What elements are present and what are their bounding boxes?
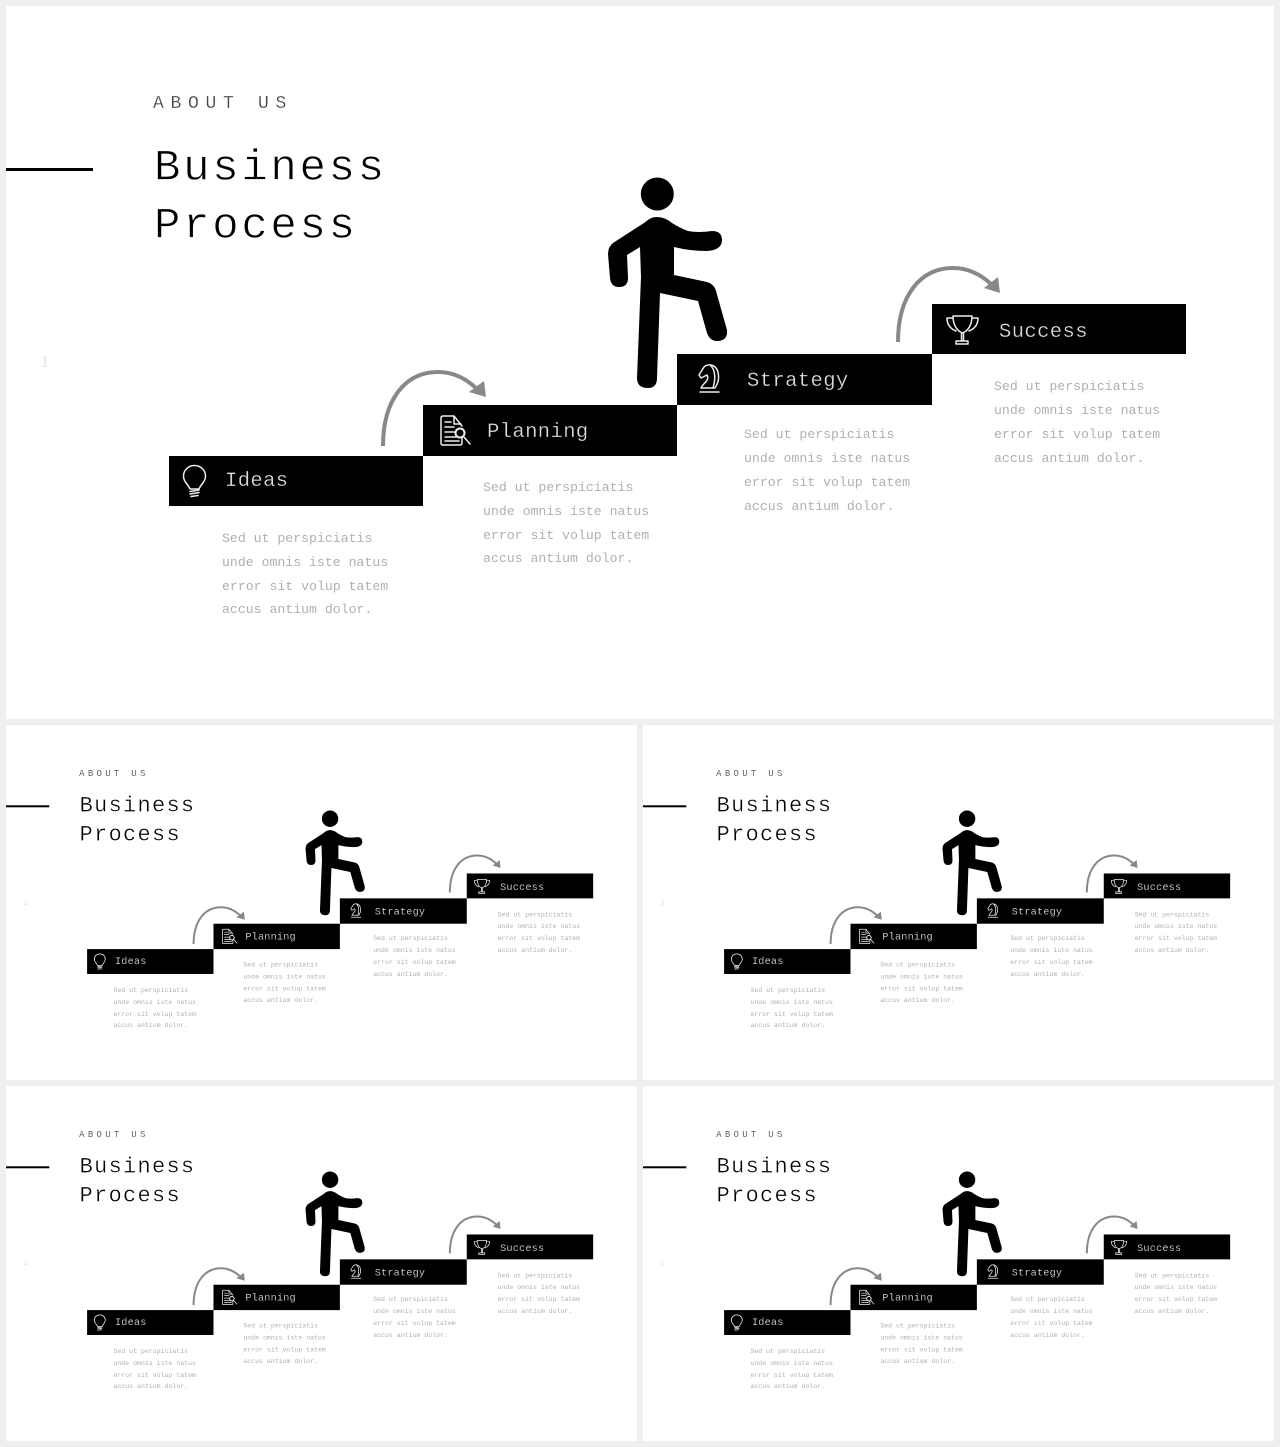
step: success — [1104, 873, 1230, 898]
label: Planning — [245, 932, 296, 944]
step: planning — [213, 924, 340, 949]
label: Success — [500, 883, 544, 894]
text: planning description: error sit volup tatem — [243, 985, 326, 992]
label: Success — [1137, 883, 1181, 894]
figure: climbing person — [306, 1172, 365, 1276]
arrow: ideas to planning — [194, 1268, 245, 1305]
icon: document and magnifier — [441, 416, 470, 445]
text: strategy description: Sed ut perspiciatis — [373, 1296, 448, 1303]
figure: climbing person — [943, 1172, 1002, 1276]
text: strategy description: accus antium dolor. — [744, 499, 894, 514]
text: planning description: accus antium dolor. — [243, 997, 318, 1004]
text: ideas description: unde omnis iste natus — [113, 999, 196, 1006]
step: success — [467, 873, 593, 898]
text: strategy description — [373, 1296, 456, 1339]
text: ideas description — [113, 1348, 196, 1390]
text: ideas description — [750, 987, 833, 1029]
text: planning description: Sed ut perspiciatis — [880, 1323, 955, 1330]
text: success description: unde omnis iste natus — [498, 923, 580, 930]
label: Success — [1137, 1244, 1181, 1255]
icon: trophy — [474, 1240, 490, 1254]
icon: light bulb — [94, 954, 105, 969]
icon: document and magnifier — [859, 1290, 874, 1305]
text: ideas description: Sed ut perspiciatis — [750, 987, 825, 994]
figure: climbing person — [306, 811, 365, 915]
icon: trophy — [1111, 879, 1127, 893]
text: success description: error sit volup tatem — [994, 427, 1160, 442]
text: planning description — [880, 962, 963, 1004]
step: success — [467, 1234, 593, 1259]
text: ideas description: unde omnis iste natus — [750, 1360, 833, 1367]
eyebrow: about us: ABOUT US — [716, 769, 786, 779]
icon: trophy — [474, 879, 490, 893]
title: Process — [154, 202, 358, 252]
label: Ideas — [752, 956, 784, 968]
text: strategy description: unde omnis iste natus — [1010, 947, 1093, 954]
title: Business — [80, 1155, 195, 1180]
icon: light bulb — [731, 954, 742, 969]
eyebrow: about us: ABOUT US — [716, 1130, 786, 1140]
text: planning description: Sed ut perspiciatis — [880, 962, 955, 969]
header rule — [6, 168, 93, 171]
text: planning description: Sed ut perspiciatis — [243, 1323, 318, 1330]
step: strategy — [977, 898, 1104, 924]
text: strategy description: Sed ut perspiciatis — [1010, 935, 1085, 942]
title: Business — [154, 144, 387, 194]
text: ideas description: error sit volup tatem — [113, 1011, 196, 1018]
text: success description: Sed ut perspiciatis — [498, 1272, 572, 1279]
text: ideas description: Sed ut perspiciatis — [750, 1348, 825, 1355]
text: strategy description — [1010, 935, 1093, 978]
icon: document and magnifier — [859, 929, 874, 944]
text: ideas description: accus antium dolor. — [113, 1383, 188, 1390]
text: ideas description: error sit volup tatem — [750, 1372, 833, 1379]
label: Planning — [245, 1293, 296, 1305]
text: ideas description — [222, 531, 388, 617]
text: planning description: error sit volup tatem — [243, 1346, 326, 1353]
step: planning — [850, 1285, 977, 1310]
step: success — [932, 304, 1186, 354]
icon: chess knight — [351, 1265, 361, 1278]
step: planning — [850, 924, 977, 949]
text: success description: unde omnis iste natus — [994, 403, 1160, 418]
icon: trophy — [1111, 1240, 1127, 1254]
label: Ideas — [115, 1317, 147, 1329]
text: success description — [1135, 911, 1217, 954]
title — [80, 794, 195, 847]
text: ideas description: error sit volup tatem — [222, 579, 388, 594]
step: planning — [213, 1285, 340, 1310]
label: Planning — [487, 421, 589, 444]
text: strategy description: accus antium dolor. — [1010, 971, 1085, 978]
text: planning description: error sit volup tatem — [880, 1346, 963, 1353]
text: success description: error sit volup tatem — [498, 1296, 580, 1303]
text: strategy description: Sed ut perspiciatis — [744, 427, 894, 442]
step: ideas — [87, 949, 213, 974]
header rule — [6, 1166, 49, 1168]
text: strategy description: error sit volup tatem — [1010, 1320, 1093, 1327]
label: Ideas — [115, 956, 147, 968]
text: success description — [994, 379, 1160, 466]
text: planning description: error sit volup tatem — [483, 528, 649, 543]
title: Process — [80, 1183, 181, 1208]
icon: light bulb — [731, 1315, 742, 1330]
text: strategy description: accus antium dolor. — [1010, 1332, 1085, 1339]
step: planning — [423, 405, 677, 456]
text: success description: Sed ut perspiciatis — [498, 911, 572, 918]
text: success description: Sed ut perspiciatis — [994, 379, 1144, 394]
eyebrow: about us: ABOUT US — [79, 769, 149, 779]
text: success description: accus antium dolor. — [994, 451, 1144, 466]
arrow: strategy to success — [450, 856, 501, 892]
text: planning description: Sed ut perspiciatis — [483, 480, 633, 495]
icon: light bulb — [184, 466, 206, 496]
text: ideas description: accus antium dolor. — [113, 1022, 188, 1029]
arrow: ideas to planning — [194, 907, 245, 944]
text: planning description: unde omnis iste natus — [483, 504, 649, 519]
icon: chess knight — [988, 1265, 998, 1278]
text: planning description: unde omnis iste natus — [880, 973, 963, 980]
step: success — [1104, 1234, 1230, 1259]
text: strategy description — [744, 427, 910, 514]
label: Ideas — [225, 470, 289, 493]
text: success description: Sed ut perspiciatis — [1135, 1272, 1209, 1279]
icon: chess knight — [351, 904, 361, 917]
text: strategy description: accus antium dolor. — [373, 971, 448, 978]
text: ideas description: accus antium dolor. — [750, 1383, 825, 1390]
arrow: ideas to planning — [831, 907, 882, 944]
text: success description: accus antium dolor. — [1135, 1308, 1209, 1315]
title: Business — [717, 794, 832, 819]
arrow: strategy to success — [898, 268, 1000, 342]
title — [717, 1155, 832, 1208]
text: planning description: accus antium dolor. — [880, 997, 955, 1004]
step: strategy — [677, 354, 932, 405]
figure: climbing person — [608, 178, 727, 388]
page number: 4 — [23, 1259, 27, 1268]
text: strategy description: error sit volup tatem — [373, 1320, 456, 1327]
text: strategy description — [373, 935, 456, 978]
page number: 1 — [41, 354, 49, 371]
text: strategy description: Sed ut perspiciatis — [1010, 1296, 1085, 1303]
eyebrow: about us: ABOUT US — [79, 1130, 149, 1140]
title — [80, 1155, 195, 1208]
arrow: strategy to success — [1087, 856, 1138, 892]
text: planning description: unde omnis iste natus — [243, 973, 326, 980]
text: strategy description — [1010, 1296, 1093, 1339]
text: success description: accus antium dolor. — [498, 1308, 572, 1315]
text: planning description — [243, 1323, 326, 1365]
text: success description — [498, 1272, 580, 1315]
step: strategy — [340, 1259, 467, 1285]
arrow: strategy to success — [1087, 1217, 1138, 1253]
panel: slide thumbnail bottom right — [643, 1086, 1274, 1441]
panel: slide thumbnail top right — [643, 725, 1274, 1080]
text: success description: unde omnis iste natus — [498, 1284, 580, 1291]
arrow: ideas to planning — [383, 372, 486, 446]
icon: chess knight — [988, 904, 998, 917]
icon: chess knight — [699, 365, 719, 392]
text: ideas description: error sit volup tatem — [113, 1372, 196, 1379]
label: Success — [500, 1244, 544, 1255]
step: ideas — [169, 456, 423, 506]
label: Strategy — [1012, 907, 1062, 918]
text: planning description — [243, 962, 326, 1004]
text: ideas description — [750, 1348, 833, 1390]
text: ideas description: Sed ut perspiciatis — [113, 1348, 188, 1355]
label: Strategy — [1012, 1268, 1062, 1279]
text: ideas description — [113, 987, 196, 1029]
text: strategy description: error sit volup tatem — [373, 959, 456, 966]
text: success description: error sit volup tatem — [1135, 1296, 1217, 1303]
step: ideas — [724, 1310, 850, 1335]
text: success description: accus antium dolor. — [1135, 947, 1209, 954]
text: strategy description: unde omnis iste natus — [744, 451, 910, 466]
icon: document and magnifier — [222, 929, 237, 944]
title: Process — [80, 822, 181, 847]
title — [154, 144, 387, 252]
text: ideas description: unde omnis iste natus — [750, 999, 833, 1006]
text: success description — [1135, 1272, 1217, 1315]
text: planning description: Sed ut perspiciatis — [243, 962, 318, 969]
title — [717, 794, 832, 847]
text: strategy description: unde omnis iste natus — [373, 1308, 456, 1315]
text: strategy description: error sit volup tatem — [1010, 959, 1093, 966]
label: Ideas — [752, 1317, 784, 1329]
text: success description: unde omnis iste natus — [1135, 1284, 1217, 1291]
icon: light bulb — [94, 1315, 105, 1330]
text: ideas description: Sed ut perspiciatis — [113, 987, 188, 994]
label: Strategy — [375, 907, 425, 918]
label: Planning — [882, 932, 933, 944]
label: Success — [999, 321, 1088, 344]
text: planning description: unde omnis iste natus — [880, 1334, 963, 1341]
header rule — [643, 1166, 686, 1168]
text: strategy description: unde omnis iste natus — [1010, 1308, 1093, 1315]
arrow: ideas to planning — [831, 1268, 882, 1305]
icon: document and magnifier — [222, 1290, 237, 1305]
text: planning description: accus antium dolor. — [483, 551, 633, 566]
text: ideas description: unde omnis iste natus — [113, 1360, 196, 1367]
step: strategy — [340, 898, 467, 924]
step: ideas — [724, 949, 850, 974]
title: Process — [717, 1183, 818, 1208]
panel: slide thumbnail top left — [6, 725, 637, 1080]
title: Business — [80, 794, 195, 819]
header rule — [643, 805, 686, 807]
text: planning description — [483, 480, 649, 566]
panel: slide thumbnail bottom left — [6, 1086, 637, 1441]
label: Strategy — [375, 1268, 425, 1279]
text: planning description: accus antium dolor. — [243, 1358, 318, 1365]
text: success description: Sed ut perspiciatis — [1135, 911, 1209, 918]
title: Process — [717, 822, 818, 847]
text: success description — [498, 911, 580, 954]
title: Business — [717, 1155, 832, 1180]
text: ideas description: error sit volup tatem — [750, 1011, 833, 1018]
text: success description: error sit volup tatem — [1135, 935, 1217, 942]
text: planning description: unde omnis iste natus — [243, 1334, 326, 1341]
label: Strategy — [747, 370, 849, 393]
step: strategy — [977, 1259, 1104, 1285]
text: planning description — [880, 1323, 963, 1365]
text: strategy description: error sit volup tatem — [744, 475, 910, 490]
text: strategy description: accus antium dolor. — [373, 1332, 448, 1339]
step: ideas — [87, 1310, 213, 1335]
page number: 2 — [23, 898, 27, 907]
icon: trophy — [947, 316, 978, 344]
text: ideas description: Sed ut perspiciatis — [222, 531, 372, 546]
text: planning description: error sit volup tatem — [880, 985, 963, 992]
text: success description: unde omnis iste natus — [1135, 923, 1217, 930]
text: ideas description: accus antium dolor. — [222, 602, 372, 617]
page number: 3 — [660, 898, 664, 907]
label: Planning — [882, 1293, 933, 1305]
text: ideas description: accus antium dolor. — [750, 1022, 825, 1029]
text: success description: accus antium dolor. — [498, 947, 572, 954]
panel: main slide — [6, 6, 1274, 719]
text: planning description: accus antium dolor. — [880, 1358, 955, 1365]
header rule — [6, 805, 49, 807]
arrow: strategy to success — [450, 1217, 501, 1253]
figure: climbing person — [943, 811, 1002, 915]
text: strategy description: unde omnis iste natus — [373, 947, 456, 954]
page number: 5 — [660, 1259, 664, 1268]
text: strategy description: Sed ut perspiciatis — [373, 935, 448, 942]
eyebrow: about us: ABOUT US — [153, 94, 293, 114]
text: ideas description: unde omnis iste natus — [222, 555, 388, 570]
text: success description: error sit volup tatem — [498, 935, 580, 942]
